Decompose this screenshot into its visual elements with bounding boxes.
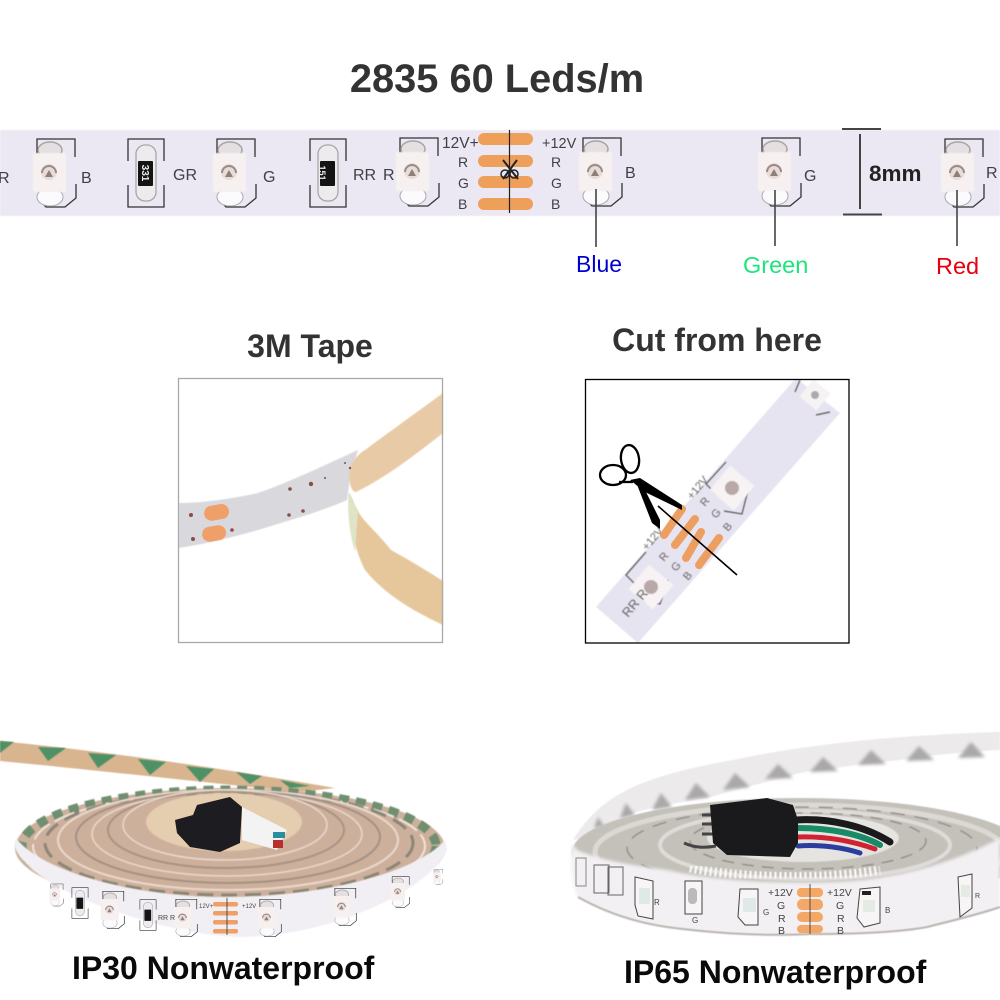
orange pads <box>664 509 719 565</box>
strip printed labels: B <box>551 196 560 212</box>
width dimension 8mm: 8mm <box>869 161 922 186</box>
strip printed labels: R <box>458 154 468 170</box>
front band details: R <box>975 893 980 900</box>
front band shading <box>578 897 1000 935</box>
front band details: B <box>885 906 890 915</box>
strip printed labels: B <box>625 165 636 182</box>
LED chips and resistors <box>33 138 984 207</box>
label: Green: Green <box>743 252 808 278</box>
front band details: 12V+ <box>199 904 214 910</box>
front band <box>14 838 447 937</box>
strip printed labels: R <box>986 165 998 182</box>
front band details <box>49 869 443 937</box>
front band <box>571 838 1000 935</box>
strip printed labels: RR <box>353 167 376 184</box>
black connector <box>175 797 242 852</box>
strip printed labels: R <box>383 167 395 184</box>
caption: IP65: IP65 Nonwaterproof <box>624 954 927 990</box>
strip printed labels <box>0 135 998 212</box>
colour leader lines <box>596 189 957 247</box>
strip printed labels: 12V+ <box>442 135 479 152</box>
front band details: G <box>777 900 785 912</box>
front band details: R <box>654 898 660 907</box>
front band details: B <box>778 925 785 937</box>
tape peeled section <box>349 393 443 492</box>
adhesive marks <box>594 742 985 828</box>
strip printed labels: +12V <box>542 136 577 152</box>
frame <box>586 380 849 643</box>
rotated LEDs <box>628 380 830 610</box>
front band details: G <box>763 908 769 917</box>
solder pads <box>478 133 533 210</box>
pad labels: B <box>681 570 695 583</box>
tape lower loop <box>349 493 443 625</box>
front band details: R <box>778 913 786 925</box>
LED chips and resistors: 151 <box>317 165 327 181</box>
pad labels: R <box>698 495 712 509</box>
pad labels: B <box>721 521 735 534</box>
title: 2835 60 Leds/m <box>350 57 644 101</box>
scissors icon <box>600 444 682 529</box>
strip printed labels: G <box>804 168 816 185</box>
pad labels: R <box>657 550 671 564</box>
black connector <box>710 798 798 857</box>
cut line <box>658 506 737 575</box>
adhesive backing tail <box>0 741 335 792</box>
panel: LED strip diagram <box>0 129 1000 279</box>
strip printed labels: B <box>81 170 92 187</box>
strip printed labels: G <box>458 175 469 191</box>
strip printed labels: GR <box>173 167 197 184</box>
wires <box>796 820 890 853</box>
cut line with scissors mark <box>501 130 518 213</box>
coil hole <box>707 814 899 862</box>
strip markings <box>626 380 830 604</box>
wire ends <box>273 832 285 838</box>
pad labels: +12V <box>640 525 666 553</box>
strip printed labels: G <box>551 175 562 191</box>
strip printed labels: R <box>551 154 561 170</box>
front band details: +12V <box>768 887 793 899</box>
upper clear strip <box>573 732 1000 840</box>
panel: 3M tape photo <box>178 378 443 642</box>
front band details <box>576 858 980 937</box>
front band details: +12V <box>242 904 256 910</box>
white connector sleeve <box>242 807 287 850</box>
width dimension 8mm <box>842 129 922 214</box>
strip silver section <box>179 450 358 548</box>
coil top <box>15 788 445 908</box>
speckled reflection <box>690 868 880 877</box>
coil rings <box>595 805 1000 899</box>
pad labels: RR R <box>619 586 651 620</box>
front band details: G <box>692 916 698 925</box>
strip printed labels: B <box>458 196 467 212</box>
front band details: G <box>836 900 844 912</box>
heading: 3M Tape: 3M Tape <box>247 328 373 364</box>
pad labels: G <box>669 560 684 574</box>
product photo: IP65 coil <box>571 732 1000 937</box>
pad labels: G <box>709 507 724 521</box>
pads and dots on strip <box>189 462 351 543</box>
connector pins <box>684 815 716 847</box>
frame <box>178 378 442 642</box>
heading: Cut from here: Cut from here <box>612 322 822 358</box>
tape rings <box>22 790 436 902</box>
caption: IP30: IP30 Nonwaterproof <box>72 950 375 986</box>
label: Red: Red <box>936 253 979 279</box>
pad labels <box>619 474 735 620</box>
strip printed labels: G <box>263 169 275 186</box>
front band details: RR R <box>158 915 175 922</box>
pad labels: +12V <box>685 474 711 502</box>
front band details: B <box>837 925 844 937</box>
label: Blue: Blue <box>576 251 622 277</box>
rotated strip <box>596 378 840 643</box>
panel: cut from here photo <box>586 378 849 643</box>
product photo: IP30 coil <box>0 741 447 937</box>
coil top <box>572 798 1000 906</box>
LED chips and resistors: 331 <box>139 165 150 182</box>
strip base <box>0 130 1000 216</box>
coil hole <box>146 793 302 851</box>
front band details: R <box>837 913 845 925</box>
front band details: +12V <box>827 887 852 899</box>
